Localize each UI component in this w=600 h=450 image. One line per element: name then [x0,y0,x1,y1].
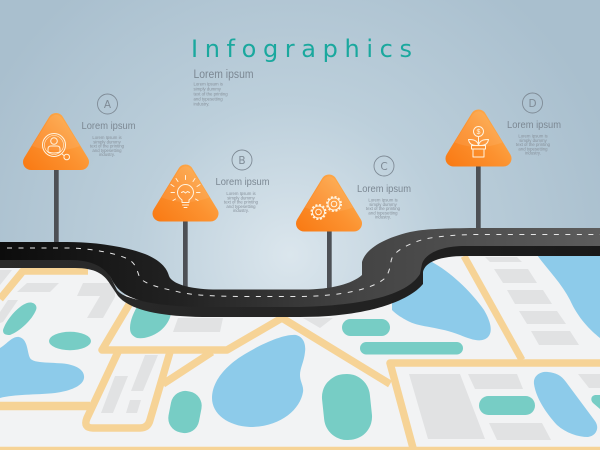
icon: person search [42,134,70,160]
label A [82,94,136,157]
label C: C [380,161,388,173]
label C: industry. [375,215,391,220]
text block: top [194,69,254,106]
label B: and typesetting [226,204,256,209]
label D: D [528,98,537,110]
label D [507,93,561,156]
sign posts [54,162,481,290]
label C: simply dummy [369,202,398,207]
label A: Lorem Ipsum is [92,135,122,140]
road side wall [0,245,600,317]
label D: Lorem ipsum [507,119,561,131]
label B: industry. [233,208,249,213]
icon: light bulb [171,176,200,208]
text block: top: text of the printing [194,92,228,96]
title: Infographics [191,35,412,63]
label B: Lorem ipsum [216,176,270,188]
label A: Lorem ipsum [82,120,136,132]
label B: simply dummy [227,195,256,200]
label D: text of the printing [516,142,551,147]
text block: top: Lorem Ipsum is [194,82,223,86]
map: grey blocks [0,257,600,440]
icon: gears [312,197,341,219]
label A: A [104,99,112,111]
sign C [304,176,354,224]
label D: industry. [525,151,541,156]
map: roads [0,256,600,448]
label B: B [238,155,246,167]
road [0,228,600,317]
text block: top: industry. [194,102,209,106]
map: lakes [0,255,600,437]
label C: Lorem ipsum [357,183,411,195]
map: parks [3,302,600,442]
label A: simply dummy [93,139,122,144]
label C: Lorem Ipsum is [368,198,398,202]
sign D [454,111,504,158]
label D: simply dummy [519,138,548,143]
road centre line [7,234,600,296]
map [0,250,600,450]
label C [357,156,411,220]
label B: Lorem Ipsum is [226,191,256,196]
label A: text of the printing [90,144,125,149]
road surface [0,228,600,307]
sign A [31,115,81,162]
label B [216,150,270,213]
text block: top: and typesetting [194,96,223,102]
sign B [160,166,210,214]
label A: industry. [99,152,115,157]
label C: and typesetting [368,210,398,215]
label D: and typesetting [518,146,548,151]
label D: Lorem Ipsum is [518,134,548,138]
text block: top: simply dummy [194,86,222,92]
icon: money plant: $ [477,129,481,136]
label A: and typesetting [92,148,122,153]
label C: text of the printing [366,206,401,211]
text block: top: Lorem ipsum [194,69,254,81]
label B: text of the printing [224,200,259,205]
